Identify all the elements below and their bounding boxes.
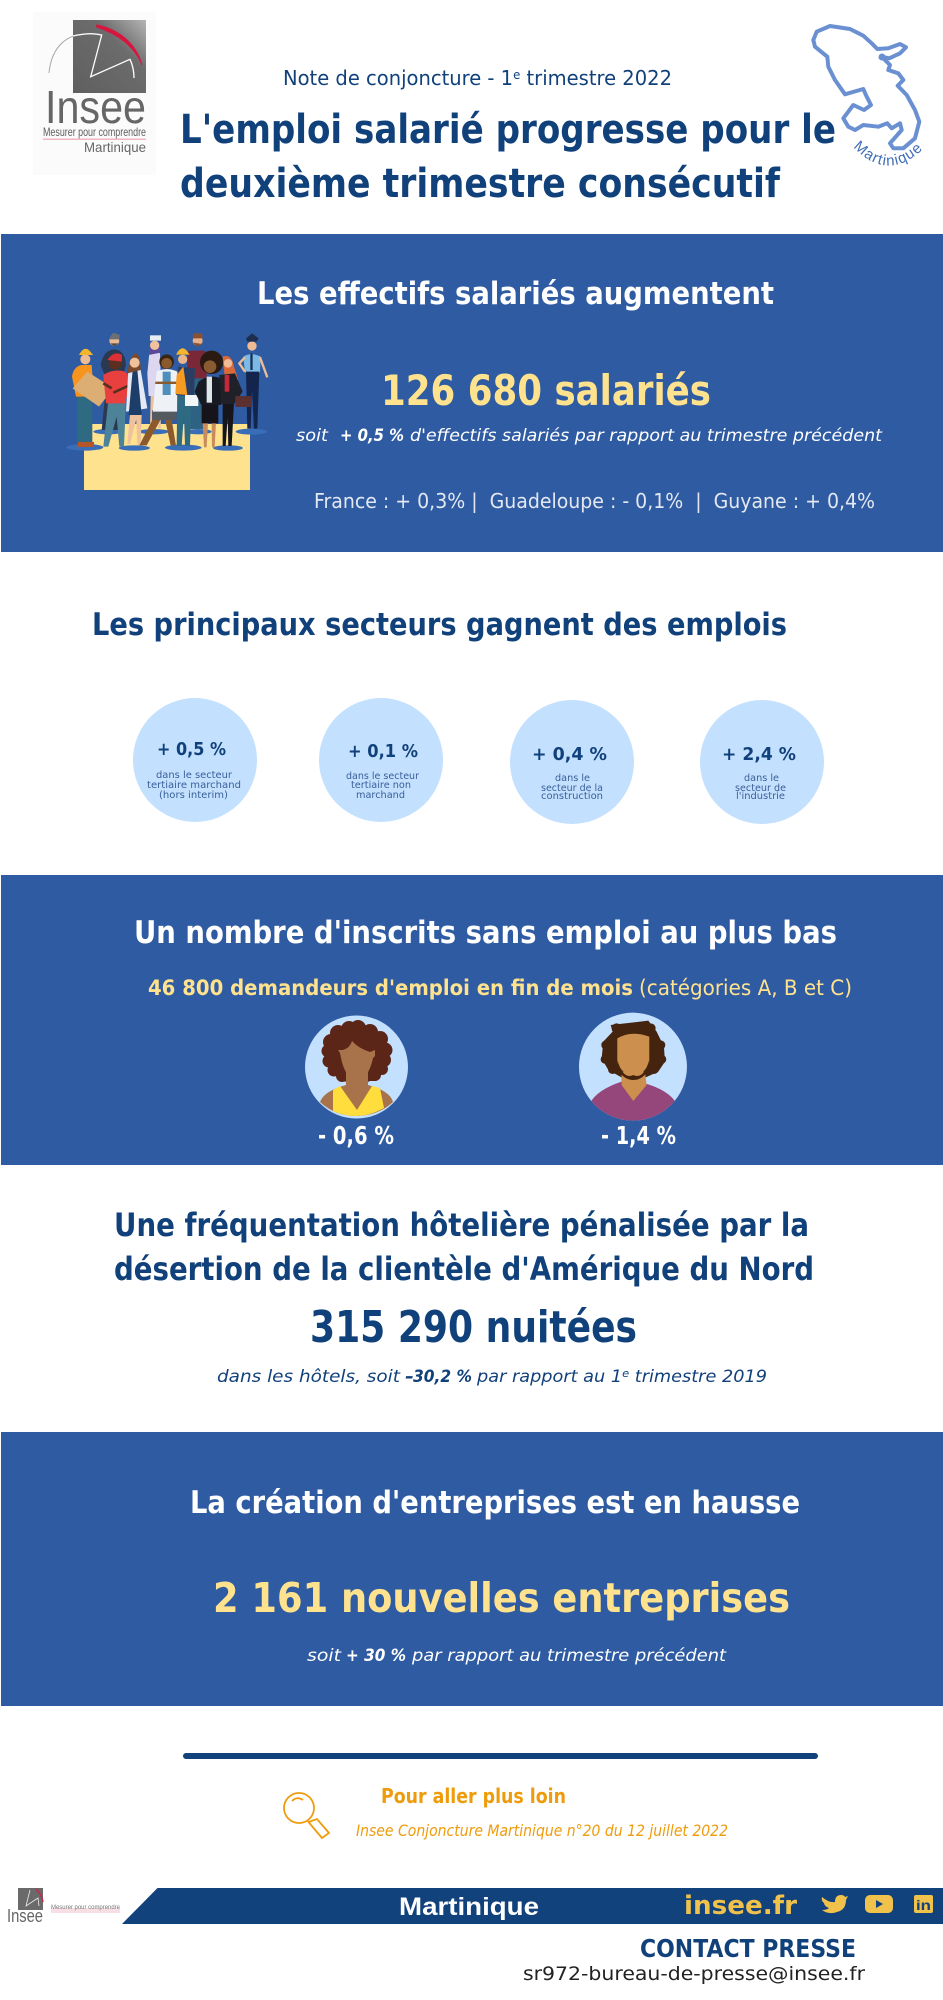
heading: fréquentation hôtelière: désertion de la clientèle d'Amérique du Nord bbox=[114, 1250, 814, 1288]
subtitle: note de conjoncture: e bbox=[513, 68, 520, 82]
footer link: insee.fr: insee.fr bbox=[684, 1891, 797, 1921]
footer logo bbox=[7, 1888, 121, 1926]
circle: tertiaire marchand: tertiaire marchand bbox=[147, 780, 241, 791]
text: nuitées comparaison: dans les hôtels, soit bbox=[217, 1367, 401, 1387]
icon: man avatar bbox=[579, 1013, 687, 1123]
heading: fréquentation hôtelière: Une fréquentation hôtelière pénalisée par la bbox=[114, 1206, 809, 1244]
text: nuitées comparaison: e bbox=[622, 1367, 629, 1380]
text: comparaison territoires: France : + 0,3% | Guadeloupe : - 0,1% | Guyane : + 0,4% bbox=[314, 489, 875, 513]
circle: industrie: dans le bbox=[744, 773, 779, 784]
circle: industrie bbox=[700, 700, 824, 824]
text: demandeurs d'emploi: 46 800 demandeurs d'emploi en fin de mois bbox=[148, 976, 633, 1000]
text: demandeurs d'emploi: (catégories A, B et C) bbox=[639, 976, 852, 1000]
text: variation entreprises: + 30 % bbox=[346, 1646, 406, 1666]
stat: femmes: - 0,6 % bbox=[318, 1121, 394, 1150]
front row bbox=[77, 395, 92, 443]
stat: hommes: - 1,4 % bbox=[601, 1121, 676, 1150]
footer band bbox=[7, 1888, 943, 1926]
circle: construction: secteur de la bbox=[541, 783, 603, 794]
circle: tertiaire non marchand: + 0,1 % bbox=[348, 741, 418, 762]
panel: demandeurs d'emploi bbox=[1, 875, 943, 1165]
text: nuitées comparaison: par rapport au 1 bbox=[477, 1367, 616, 1387]
footer logo: Insee bbox=[7, 1906, 43, 1926]
logo: Insee Martinique bbox=[33, 12, 156, 175]
circle: industrie: l'industrie bbox=[736, 791, 785, 802]
circle: tertiaire non marchand bbox=[319, 698, 443, 822]
icon: magnifying glass bbox=[284, 1793, 329, 1838]
text: nuitées comparaison: 30,2 % bbox=[413, 1367, 472, 1387]
icon: woman avatar bbox=[305, 1016, 408, 1118]
circle: tertiaire marchand: (hors interim) bbox=[159, 790, 228, 801]
icon: youtube bbox=[865, 1895, 893, 1913]
circle: tertiaire marchand bbox=[133, 698, 257, 822]
footer label: Martinique: Martinique bbox=[399, 1893, 539, 1921]
stat: nouvelles entreprises: 2 161 nouvelles entreprises bbox=[213, 1574, 790, 1622]
circle: tertiaire marchand: + 0,5 % bbox=[157, 739, 226, 760]
contact email: sr972-bureau-de-presse@insee.fr bbox=[523, 1963, 865, 1985]
icon: twitter bbox=[822, 1895, 848, 1913]
stat: 126 680 salariés: 126 680 salariés bbox=[381, 366, 711, 415]
text: variation trimestrielle: d'effectifs salariés par rapport au trimestre précédent bbox=[410, 426, 883, 446]
circle: construction bbox=[510, 700, 634, 824]
panel: effectifs salariés bbox=[1, 234, 943, 552]
text: référence publication: Insee Conjoncture Martinique n°20 du 12 juillet 2022 bbox=[356, 1821, 728, 1840]
circle: tertiaire non marchand: tertiaire non bbox=[351, 780, 411, 791]
icon: linkedin bbox=[914, 1895, 933, 1913]
subtitle: note de conjoncture: Note de conjoncture - 1 bbox=[283, 66, 519, 90]
text: variation trimestrielle: soit bbox=[296, 426, 329, 446]
text: pour aller plus loin: Pour aller plus loin bbox=[381, 1784, 566, 1808]
back row bbox=[101, 349, 126, 430]
title: deuxième trimestre consécutif bbox=[180, 161, 781, 207]
text: nuitées comparaison bbox=[217, 1367, 767, 1387]
illustration: group of workers bbox=[67, 333, 267, 490]
circle: industrie: secteur de bbox=[735, 783, 786, 794]
subtitle: note de conjoncture: trimestre 2022 bbox=[520, 66, 672, 90]
panel: création d'entreprises bbox=[1, 1432, 943, 1706]
heading: effectifs salariés: Les effectifs salariés augmentent bbox=[257, 276, 774, 312]
text: variation entreprises: par rapport au trimestre précédent bbox=[411, 1646, 727, 1666]
text: nuitées comparaison: trimestre 2019 bbox=[629, 1367, 767, 1387]
text: nuitées comparaison: - bbox=[405, 1367, 414, 1387]
circle: tertiaire non marchand: marchand bbox=[356, 790, 405, 801]
title bbox=[180, 107, 836, 207]
heading: principaux secteurs: Les principaux secteurs gagnent des emplois bbox=[92, 607, 787, 643]
heading: fréquentation hôtelière bbox=[114, 1206, 814, 1288]
circle: tertiaire non marchand: dans le secteur bbox=[346, 771, 420, 782]
circle: tertiaire marchand: dans le secteur bbox=[156, 770, 233, 781]
map: Martinique outline bbox=[811, 24, 922, 166]
circle: construction: dans le bbox=[555, 773, 590, 784]
title: L'emploi salarié progresse pour le bbox=[180, 107, 836, 153]
icon: linkedin: in bbox=[916, 1897, 931, 1913]
circle: construction: construction bbox=[541, 791, 603, 802]
footer logo: Mesurer pour comprendre bbox=[51, 1905, 121, 1911]
map: Martinique outline: Martinique bbox=[854, 140, 922, 166]
heading: inscrits sans emploi: Un nombre d'inscrits sans emploi au plus bas bbox=[134, 915, 837, 951]
circle: construction: + 0,4 % bbox=[532, 744, 607, 765]
text: variation entreprises: soit bbox=[307, 1646, 342, 1666]
heading: création d'entreprises: La création d'entreprises est en hausse bbox=[190, 1485, 800, 1521]
logo: Insee Martinique: Insee bbox=[45, 81, 146, 133]
logo: Insee Martinique: Martinique bbox=[84, 139, 146, 155]
text: variation trimestrielle: + 0,5 % bbox=[340, 426, 404, 446]
circle: industrie: + 2,4 % bbox=[722, 744, 796, 765]
stat: 315 290 nuitées: 315 290 nuitées bbox=[310, 1302, 637, 1353]
contact heading: CONTACT PRESSE bbox=[640, 1934, 856, 1963]
logo: Insee Martinique: Mesurer pour comprendre bbox=[43, 125, 146, 139]
